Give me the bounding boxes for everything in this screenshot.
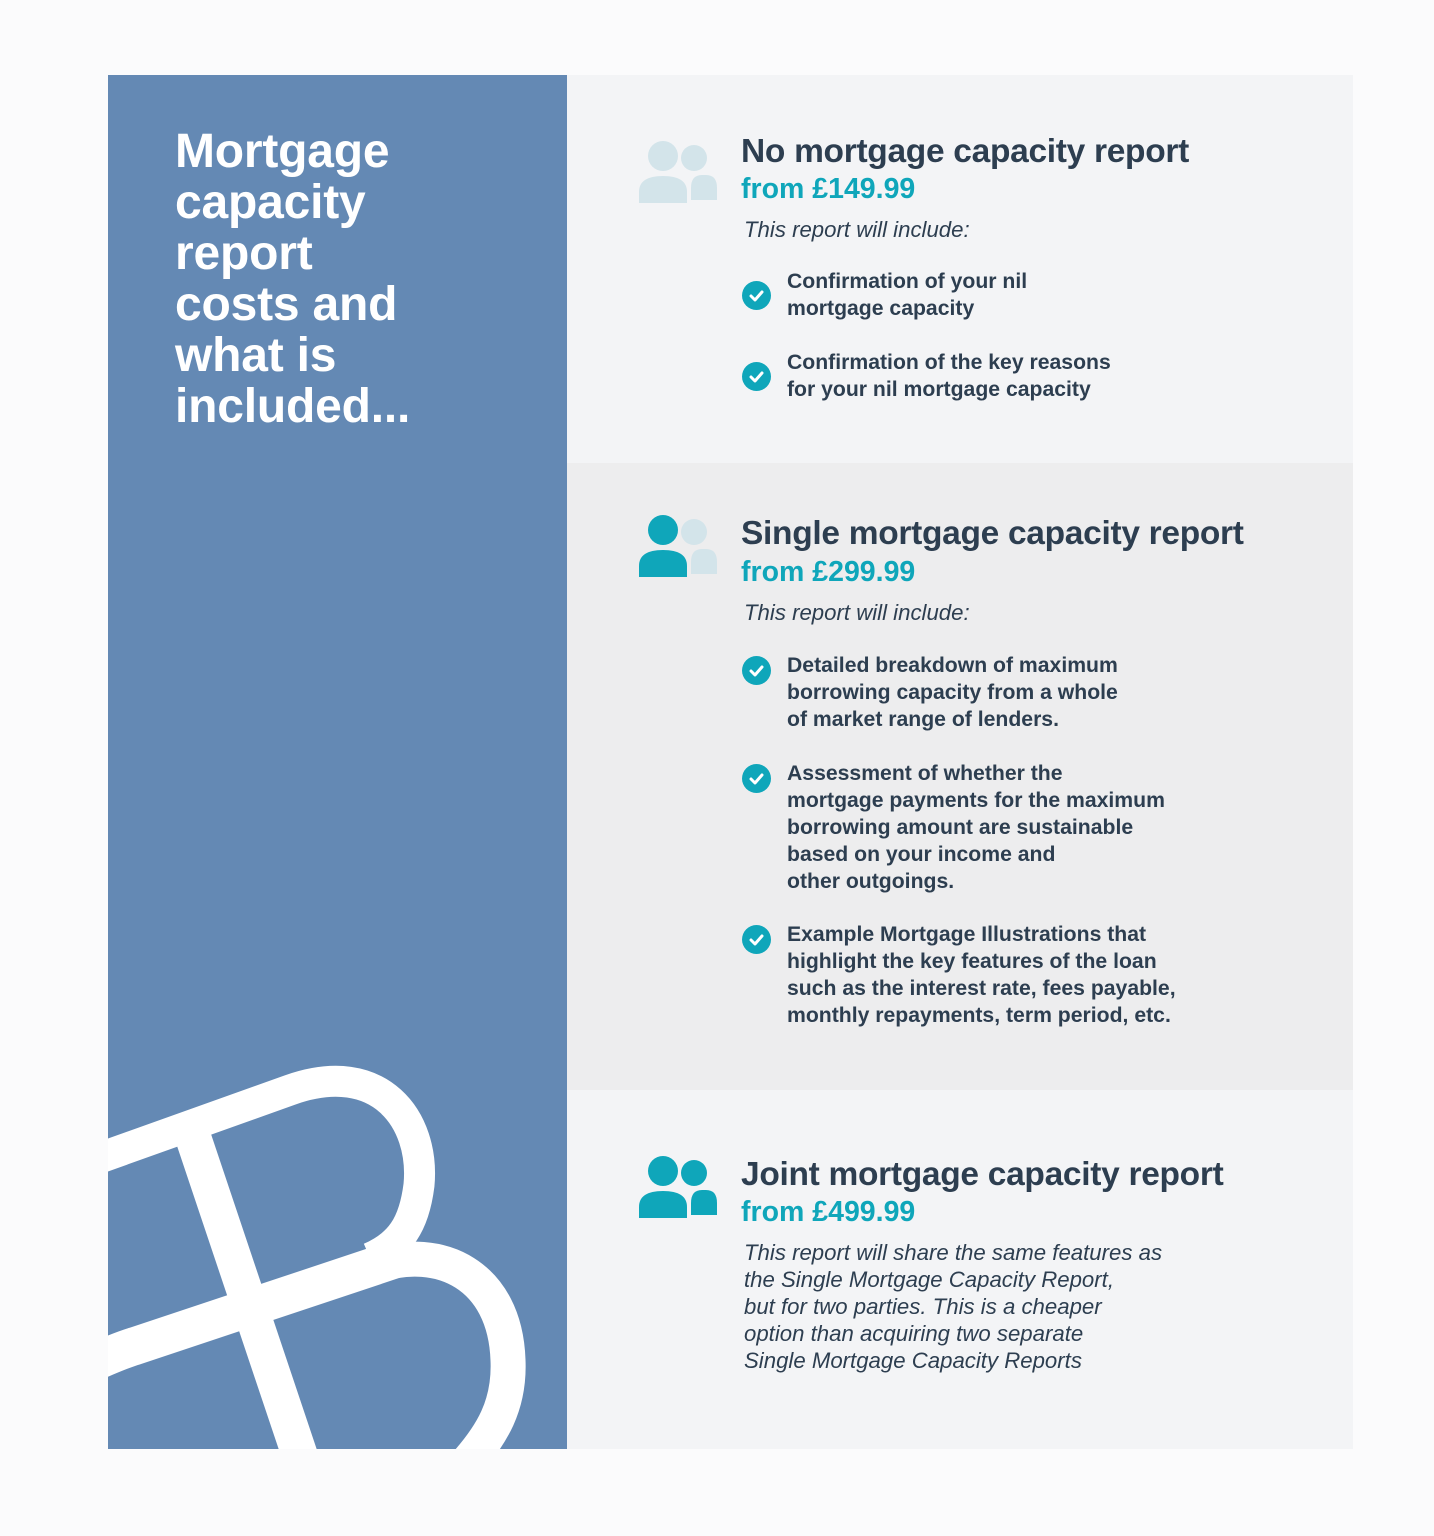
heading 3: Joint mortgage capacity report — [741, 1156, 1223, 1193]
bullet 2.3: monthly repayments, term period, etc. — [787, 1004, 1171, 1027]
bullet 2.2: other outgoings. — [787, 870, 954, 893]
title: included... — [175, 380, 410, 433]
bullet 1.1: mortgage capacity — [787, 297, 974, 320]
title: costs and — [175, 278, 397, 331]
icon: single person — [639, 515, 717, 577]
bullet 2.1: Detailed breakdown of maximum — [787, 654, 1118, 677]
description 3: but for two parties. This is a cheaper — [744, 1294, 1102, 1319]
section: no mortgage capacity report — [567, 75, 1353, 463]
title: report — [175, 227, 312, 280]
icon: two people faded — [639, 141, 717, 203]
bullet 2.3: highlight the key features of the loan — [787, 950, 1157, 973]
icon: two people — [639, 1156, 717, 1218]
bullet 2.1: borrowing capacity from a whole — [787, 681, 1118, 704]
description 3 — [744, 1240, 1162, 1373]
title: capacity — [175, 176, 366, 229]
heading 2: Single mortgage capacity report — [741, 515, 1244, 552]
bullet 2.2: borrowing amount are sustainable — [787, 816, 1133, 839]
description 3: option than acquiring two separate — [744, 1321, 1083, 1346]
price 1: from £149.99 — [741, 173, 915, 205]
bullet 2.2: mortgage payments for the maximum — [787, 789, 1165, 812]
bullet 1.2: for your nil mortgage capacity — [787, 378, 1091, 401]
bullet 1.2: Confirmation of the key reasons — [787, 351, 1111, 374]
heading 1: No mortgage capacity report — [741, 133, 1189, 170]
bullet 2.3: such as the interest rate, fees payable, — [787, 977, 1176, 1000]
bullet 2.1 — [742, 654, 1118, 731]
bullet 1.2 — [742, 351, 1111, 401]
description 3: the Single Mortgage Capacity Report, — [744, 1267, 1114, 1292]
section: joint mortgage capacity report — [567, 1090, 1353, 1449]
title: what is — [175, 329, 336, 382]
price 2: from £299.99 — [741, 556, 915, 588]
intro 1: This report will include: — [744, 217, 970, 242]
intro 2: This report will include: — [744, 600, 970, 625]
logo: B mark — [108, 1066, 526, 1449]
bullet 1.1 — [742, 270, 1027, 320]
bullet 2.2: Assessment of whether the — [787, 762, 1063, 785]
bullet 2.3 — [742, 923, 1176, 1027]
bullet 2.2: based on your income and — [787, 843, 1055, 866]
title — [174, 125, 410, 433]
left panel — [108, 75, 567, 1449]
bullet 2.3: Example Mortgage Illustrations that — [787, 923, 1146, 946]
bullet 1.1: Confirmation of your nil — [787, 270, 1027, 293]
price 3: from £499.99 — [741, 1196, 915, 1228]
section: single mortgage capacity report — [567, 463, 1353, 1090]
description 3: This report will share the same features as — [744, 1240, 1162, 1265]
title: Mortgage — [175, 125, 389, 178]
description 3: Single Mortgage Capacity Reports — [744, 1348, 1082, 1373]
bullet 2.2 — [742, 762, 1165, 893]
bullet 2.1: of market range of lenders. — [787, 708, 1059, 731]
